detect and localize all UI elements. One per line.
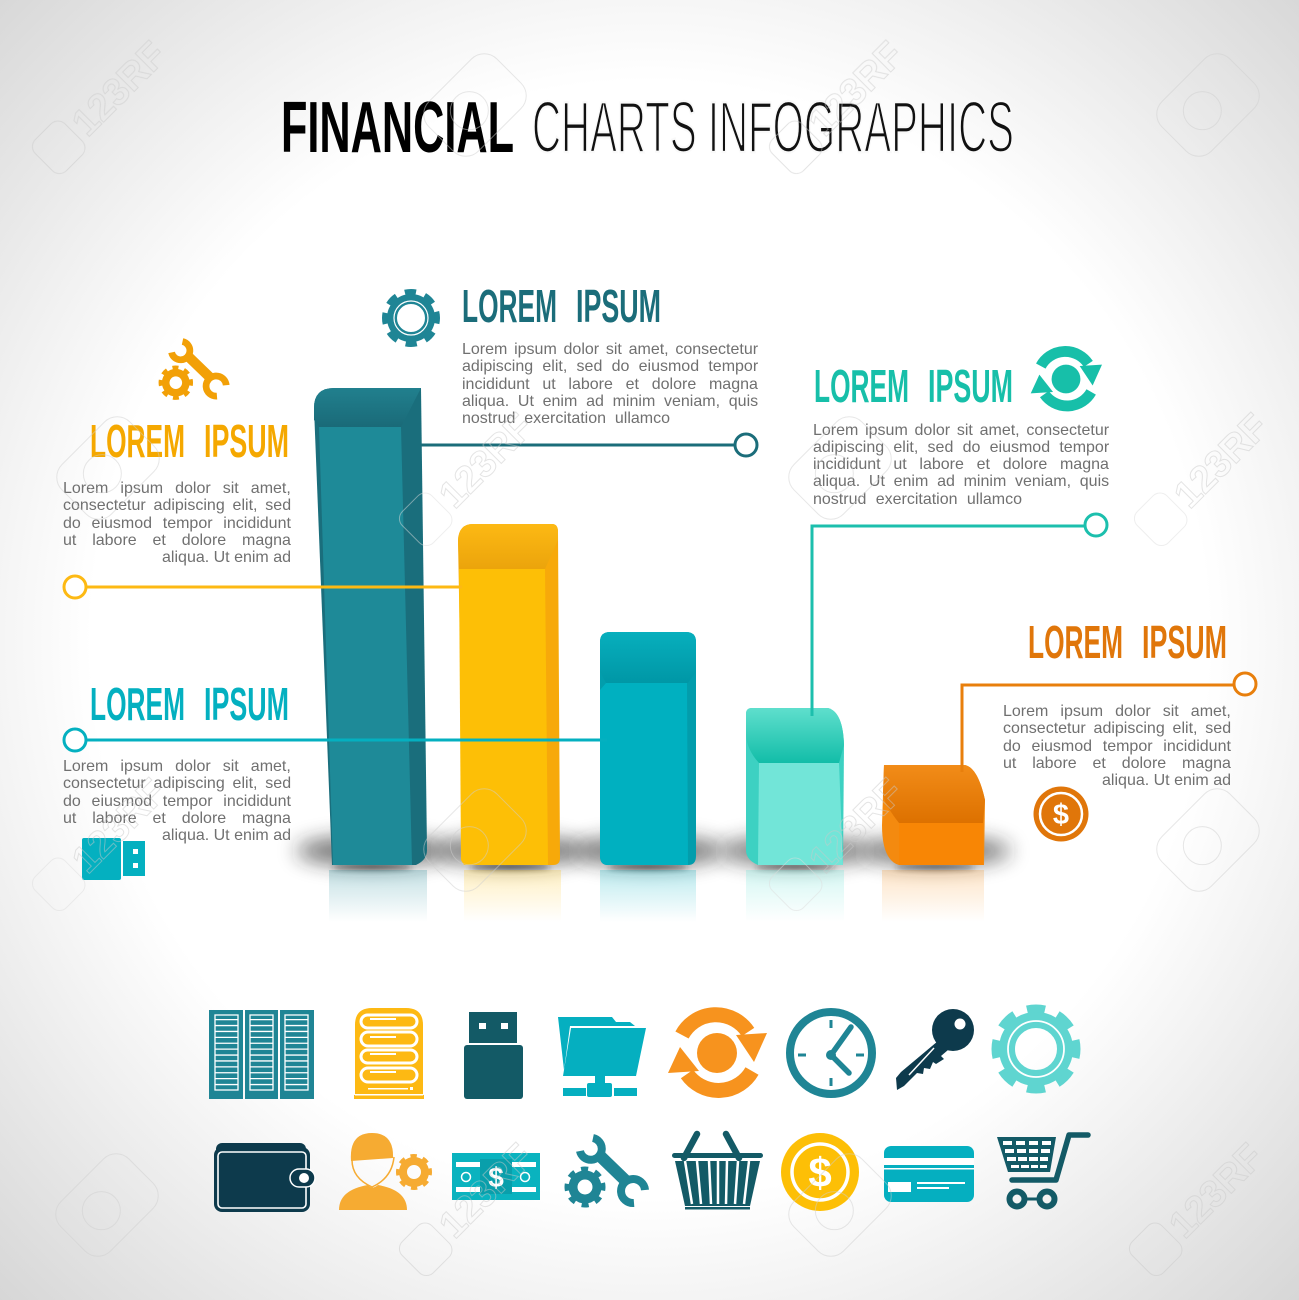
text block: Lorem ipsum dolor sit amet, consectetur — [462, 341, 759, 358]
icon: key — [896, 1009, 974, 1090]
watermarks: 123RF — [431, 1136, 542, 1246]
text block: incididunt ut labore et dolore magna — [813, 456, 1109, 473]
text block: do eiusmod tempor incididunt — [63, 515, 291, 532]
heading: LOREM — [90, 415, 185, 467]
text block: incididunt ut labore et dolore magna — [462, 376, 758, 393]
heading: LOREM — [1028, 616, 1123, 668]
icon: usb drive — [464, 1012, 523, 1099]
heading: IPSUM — [204, 415, 289, 467]
text block: consectetur adipiscing elit, sed — [1003, 720, 1231, 737]
text block: nostrud exercitation ullamco — [813, 491, 1022, 508]
panel: teal block — [385, 280, 759, 427]
icon: shopping cart — [997, 1135, 1088, 1206]
connector: yellow — [64, 576, 462, 598]
icon: dollar coin — [1034, 786, 1088, 842]
icon: gold coin — [781, 1133, 859, 1211]
text block: ut labore et dolore magna — [1003, 755, 1231, 772]
text block: Lorem ipsum dolor sit amet, — [63, 758, 291, 775]
bar 3 — [600, 632, 696, 865]
icon: person with gear — [339, 1133, 429, 1210]
icon: banknote: $ — [488, 1162, 504, 1193]
text block — [813, 422, 1110, 508]
heading: IPSUM — [576, 280, 661, 332]
icon: gold coin: $ — [808, 1149, 832, 1196]
text block: aliqua. Ut enim ad — [162, 827, 291, 844]
icon: clock — [790, 1012, 872, 1094]
text block — [1003, 703, 1231, 789]
panel: green block — [813, 351, 1110, 508]
icon: wrench and gear — [568, 1138, 645, 1204]
panel: orange right block — [1003, 616, 1231, 842]
text block: Lorem ipsum dolor sit amet, — [1003, 703, 1231, 720]
watermarks: 123RF — [801, 771, 912, 881]
text block: aliqua. Ut enim ad — [162, 549, 291, 566]
icon: usb — [82, 838, 145, 880]
text block: Lorem ipsum dolor sit amet, — [63, 480, 291, 497]
connector: cyan — [64, 729, 607, 751]
icon: network folder — [558, 1017, 646, 1097]
bar 5 — [882, 765, 985, 865]
text block: ut labore et dolore magna — [63, 532, 291, 549]
text block — [462, 341, 759, 427]
ground shadows — [296, 836, 1011, 870]
icon: wallet — [214, 1143, 315, 1212]
watermarks: 123RF — [801, 34, 912, 144]
icon: server — [354, 1008, 424, 1099]
text block: aliqua. Ut enim ad minim veniam, quis — [813, 473, 1109, 490]
text block: do eiusmod tempor incididunt — [63, 793, 291, 810]
text block: aliqua. Ut enim ad — [1102, 772, 1231, 789]
heading: LOREM — [814, 360, 909, 412]
panel: orange block — [63, 342, 291, 566]
text block: nostrud exercitation ullamco — [462, 410, 670, 427]
watermarks: 123RF — [64, 771, 175, 881]
connector: dark teal — [421, 434, 757, 456]
heading: IPSUM — [204, 678, 289, 730]
bar 4 — [746, 708, 844, 865]
icon: credit card — [884, 1146, 974, 1202]
text block: consectetur adipiscing elit, sed — [63, 775, 291, 792]
heading: LOREM — [462, 280, 557, 332]
icon: dollar coin: $ — [1053, 799, 1069, 831]
reflections — [329, 870, 984, 922]
icon: gear — [996, 1009, 1076, 1089]
text block: Lorem ipsum dolor sit amet, consectetur — [813, 422, 1110, 439]
connector: green — [812, 514, 1107, 716]
text block: consectetur adipiscing elit, sed — [63, 497, 291, 514]
icon row 1 — [209, 1008, 1076, 1099]
connector: orange — [962, 673, 1256, 772]
icon: gear — [385, 292, 437, 344]
text block: adipiscing elit, sed do eiusmod tempor — [462, 358, 759, 375]
icon: banknote — [452, 1153, 540, 1200]
text block — [63, 758, 291, 844]
title — [281, 88, 1014, 168]
heading: LOREM — [90, 678, 185, 730]
icon: refresh — [668, 1015, 767, 1090]
icon: lockers — [209, 1010, 314, 1099]
text block: adipiscing elit, sed do eiusmod tempor — [813, 439, 1110, 456]
text block: aliqua. Ut enim ad minim veniam, quis — [462, 393, 758, 410]
icon: basket — [672, 1134, 763, 1210]
bar 2 — [458, 524, 560, 865]
bar chart — [296, 388, 1011, 922]
heading: IPSUM — [1142, 616, 1227, 668]
text block: ut labore et dolore magna — [63, 810, 291, 827]
heading: IPSUM — [928, 360, 1013, 412]
text block: do eiusmod tempor incididunt — [1003, 738, 1231, 755]
bar 1 — [314, 388, 427, 865]
icon: wrench and gear — [162, 342, 226, 397]
text block — [63, 480, 291, 566]
watermarks: 123RF — [64, 34, 175, 144]
icon: refresh — [1031, 351, 1102, 406]
panel: cyan block — [63, 678, 291, 880]
icon row 2 — [214, 1133, 1088, 1212]
title: FINANCIAL — [281, 88, 514, 168]
watermarks: 123RF — [431, 406, 542, 516]
watermarks: 123RF — [1166, 406, 1277, 516]
watermarks: 123RF — [1161, 1136, 1272, 1246]
